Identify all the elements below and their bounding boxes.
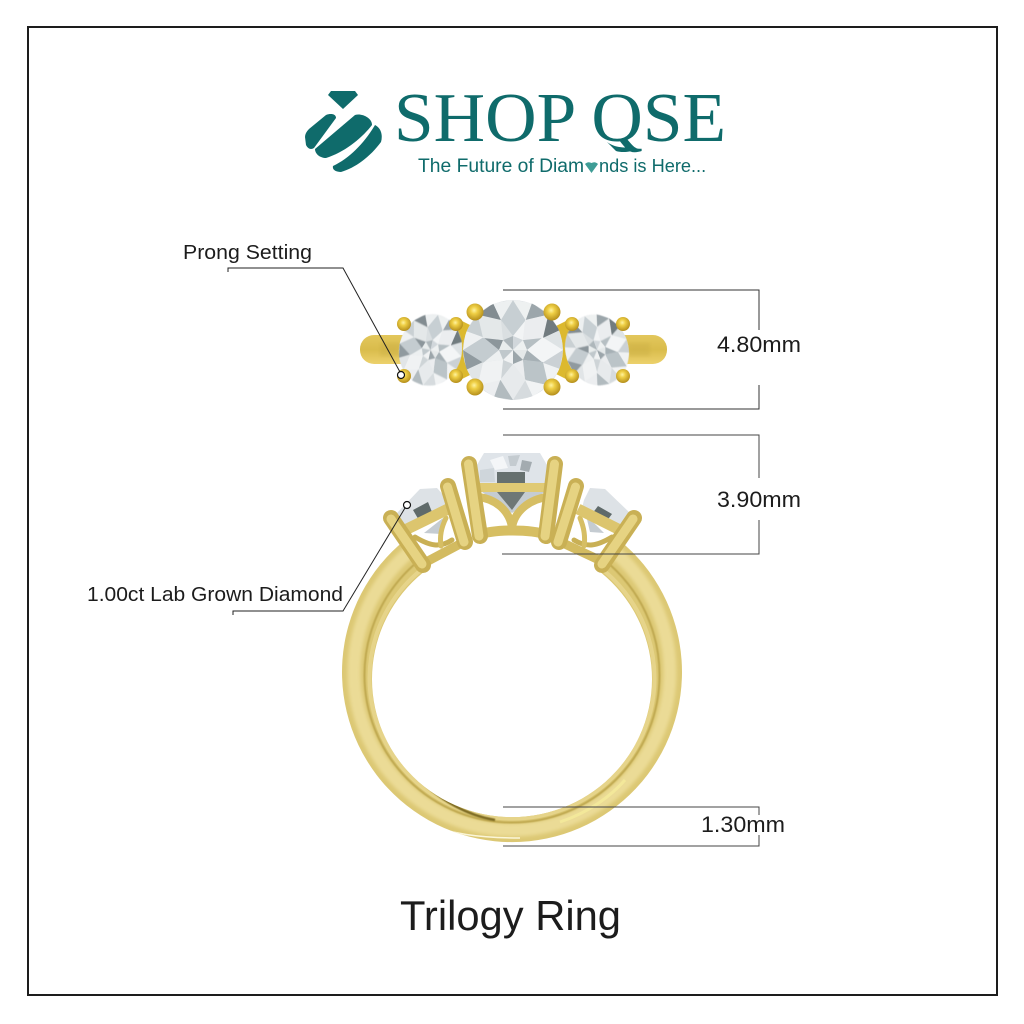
left gallery	[403, 509, 460, 561]
callout: prong setting	[183, 242, 404, 378]
center gallery	[478, 497, 548, 535]
bracket: 4.80mm	[503, 290, 759, 409]
title: Trilogy Ring	[400, 892, 621, 939]
logo tagline: nds is Here...	[599, 156, 706, 176]
center horizontal bar	[477, 483, 547, 492]
value: 1.30mm: 1.30mm	[701, 812, 785, 837]
icon: logo diamond and stripes	[305, 91, 382, 172]
dimension: 1.30mm	[503, 807, 785, 846]
callout: lab grown diamond	[87, 502, 410, 615]
value: 3.90mm: 3.90mm	[717, 487, 801, 512]
logo wordmark: SHOP QSE	[394, 80, 726, 157]
leader line: lab grown diamond	[233, 508, 405, 615]
center pavilion shadow	[497, 492, 525, 510]
top view ring	[360, 292, 667, 408]
left diamond	[397, 488, 448, 530]
bracket: 3.90mm	[502, 435, 759, 554]
left diamond shadow	[413, 502, 432, 522]
center diamond crown	[477, 453, 547, 483]
gold connectors between stones	[456, 318, 572, 382]
right diamond shadow	[592, 506, 612, 522]
ring shank top view	[360, 335, 667, 364]
side view ring	[340, 453, 684, 844]
right gallery	[565, 509, 622, 559]
value: 4.80mm: 4.80mm	[717, 332, 801, 357]
ring band	[342, 544, 682, 842]
label: lab grown diamond: 1.00ct Lab Grown Diamond	[87, 584, 343, 606]
right side diamond	[548, 298, 646, 402]
shank shadow left	[380, 343, 400, 356]
shank shadow right	[628, 343, 650, 356]
center diamond pavilion	[482, 492, 545, 513]
marker: prong setting	[398, 372, 404, 378]
logo tagline: The Future of Diam	[418, 156, 584, 177]
left side diamond	[386, 301, 475, 399]
center diamond facets	[480, 455, 532, 483]
prong posts	[391, 464, 634, 565]
left diamond pavilion	[424, 518, 443, 534]
logo tail of Q	[607, 142, 637, 152]
dimension: 4.80mm	[503, 290, 801, 409]
brand logo	[305, 80, 726, 177]
logo tagline: o	[587, 156, 598, 177]
leader line: prong setting	[228, 268, 400, 372]
dimension: 3.90mm	[502, 435, 801, 554]
marker: lab grown diamond	[404, 502, 410, 508]
right diamond	[582, 488, 630, 528]
right diamond pavilion	[586, 515, 604, 533]
label: prong setting: Prong Setting	[183, 242, 312, 264]
prongs	[397, 304, 630, 396]
bracket: 1.30mm	[503, 807, 759, 846]
icon: tagline diamond heart	[585, 162, 598, 173]
center diamond	[455, 292, 571, 408]
